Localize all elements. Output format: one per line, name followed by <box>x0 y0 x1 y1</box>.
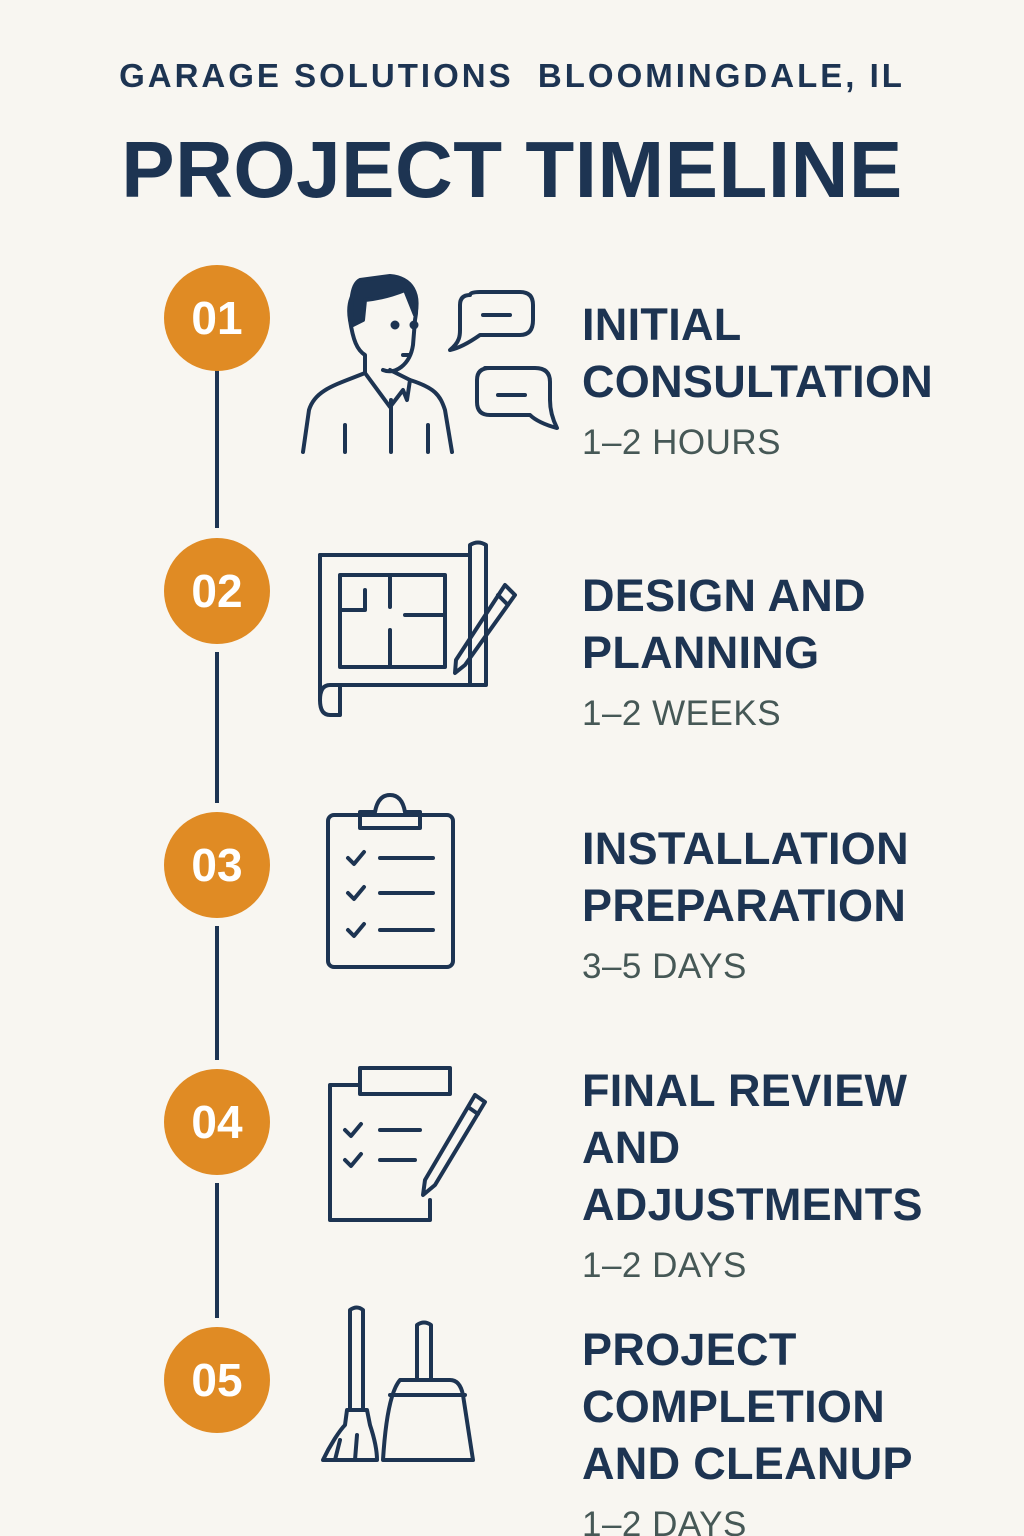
step 01 text: INITIAL <box>582 299 742 350</box>
step 03 text: 3–5 DAYS <box>582 947 747 986</box>
icon: checklist with pencil <box>328 1066 488 1222</box>
step 03 text: PREPARATION <box>582 880 906 931</box>
step 05 text: AND CLEANUP <box>582 1438 913 1489</box>
step 04 number: 04 <box>191 1096 243 1148</box>
step 01 number: 01 <box>191 292 243 344</box>
step 03 number <box>164 812 270 918</box>
step 04 text: AND <box>582 1122 680 1173</box>
step 05 number <box>164 1327 270 1433</box>
step 01 number <box>164 265 270 371</box>
step 02 text: PLANNING <box>582 627 819 678</box>
icon: blueprint with pencil <box>318 540 518 717</box>
step 02 text: 1–2 WEEKS <box>582 694 781 733</box>
step 03 text: INSTALLATION <box>582 823 909 874</box>
step 04 text: FINAL REVIEW <box>582 1065 907 1116</box>
icon: clipboard checklist <box>326 793 455 969</box>
step 05 text: COMPLETION <box>582 1381 885 1432</box>
step 04 text <box>582 1065 923 1285</box>
step 03 text <box>582 823 909 986</box>
step 03 number: 03 <box>191 839 243 891</box>
step 04 text: ADJUSTMENTS <box>582 1179 923 1230</box>
step 01 text: 1–2 HOURS <box>582 423 781 462</box>
step 01 text: CONSULTATION <box>582 356 933 407</box>
step 02 number: 02 <box>191 565 243 617</box>
header subtitle: GARAGE SOLUTIONS BLOOMINGDALE, IL <box>119 57 905 94</box>
title: PROJECT TIMELINE <box>121 125 903 214</box>
icon: broom and dustpan <box>321 1306 475 1462</box>
step 01 text <box>582 299 933 462</box>
step 05 number: 05 <box>191 1354 243 1406</box>
step 02 text: DESIGN AND <box>582 570 866 621</box>
step 05 text <box>582 1324 913 1536</box>
step 04 number <box>164 1069 270 1175</box>
step 02 text <box>582 570 866 733</box>
step 04 text: 1–2 DAYS <box>582 1246 747 1285</box>
step 02 number <box>164 538 270 644</box>
icon: person with speech bubbles <box>301 274 560 454</box>
step 05 text: PROJECT <box>582 1324 797 1375</box>
